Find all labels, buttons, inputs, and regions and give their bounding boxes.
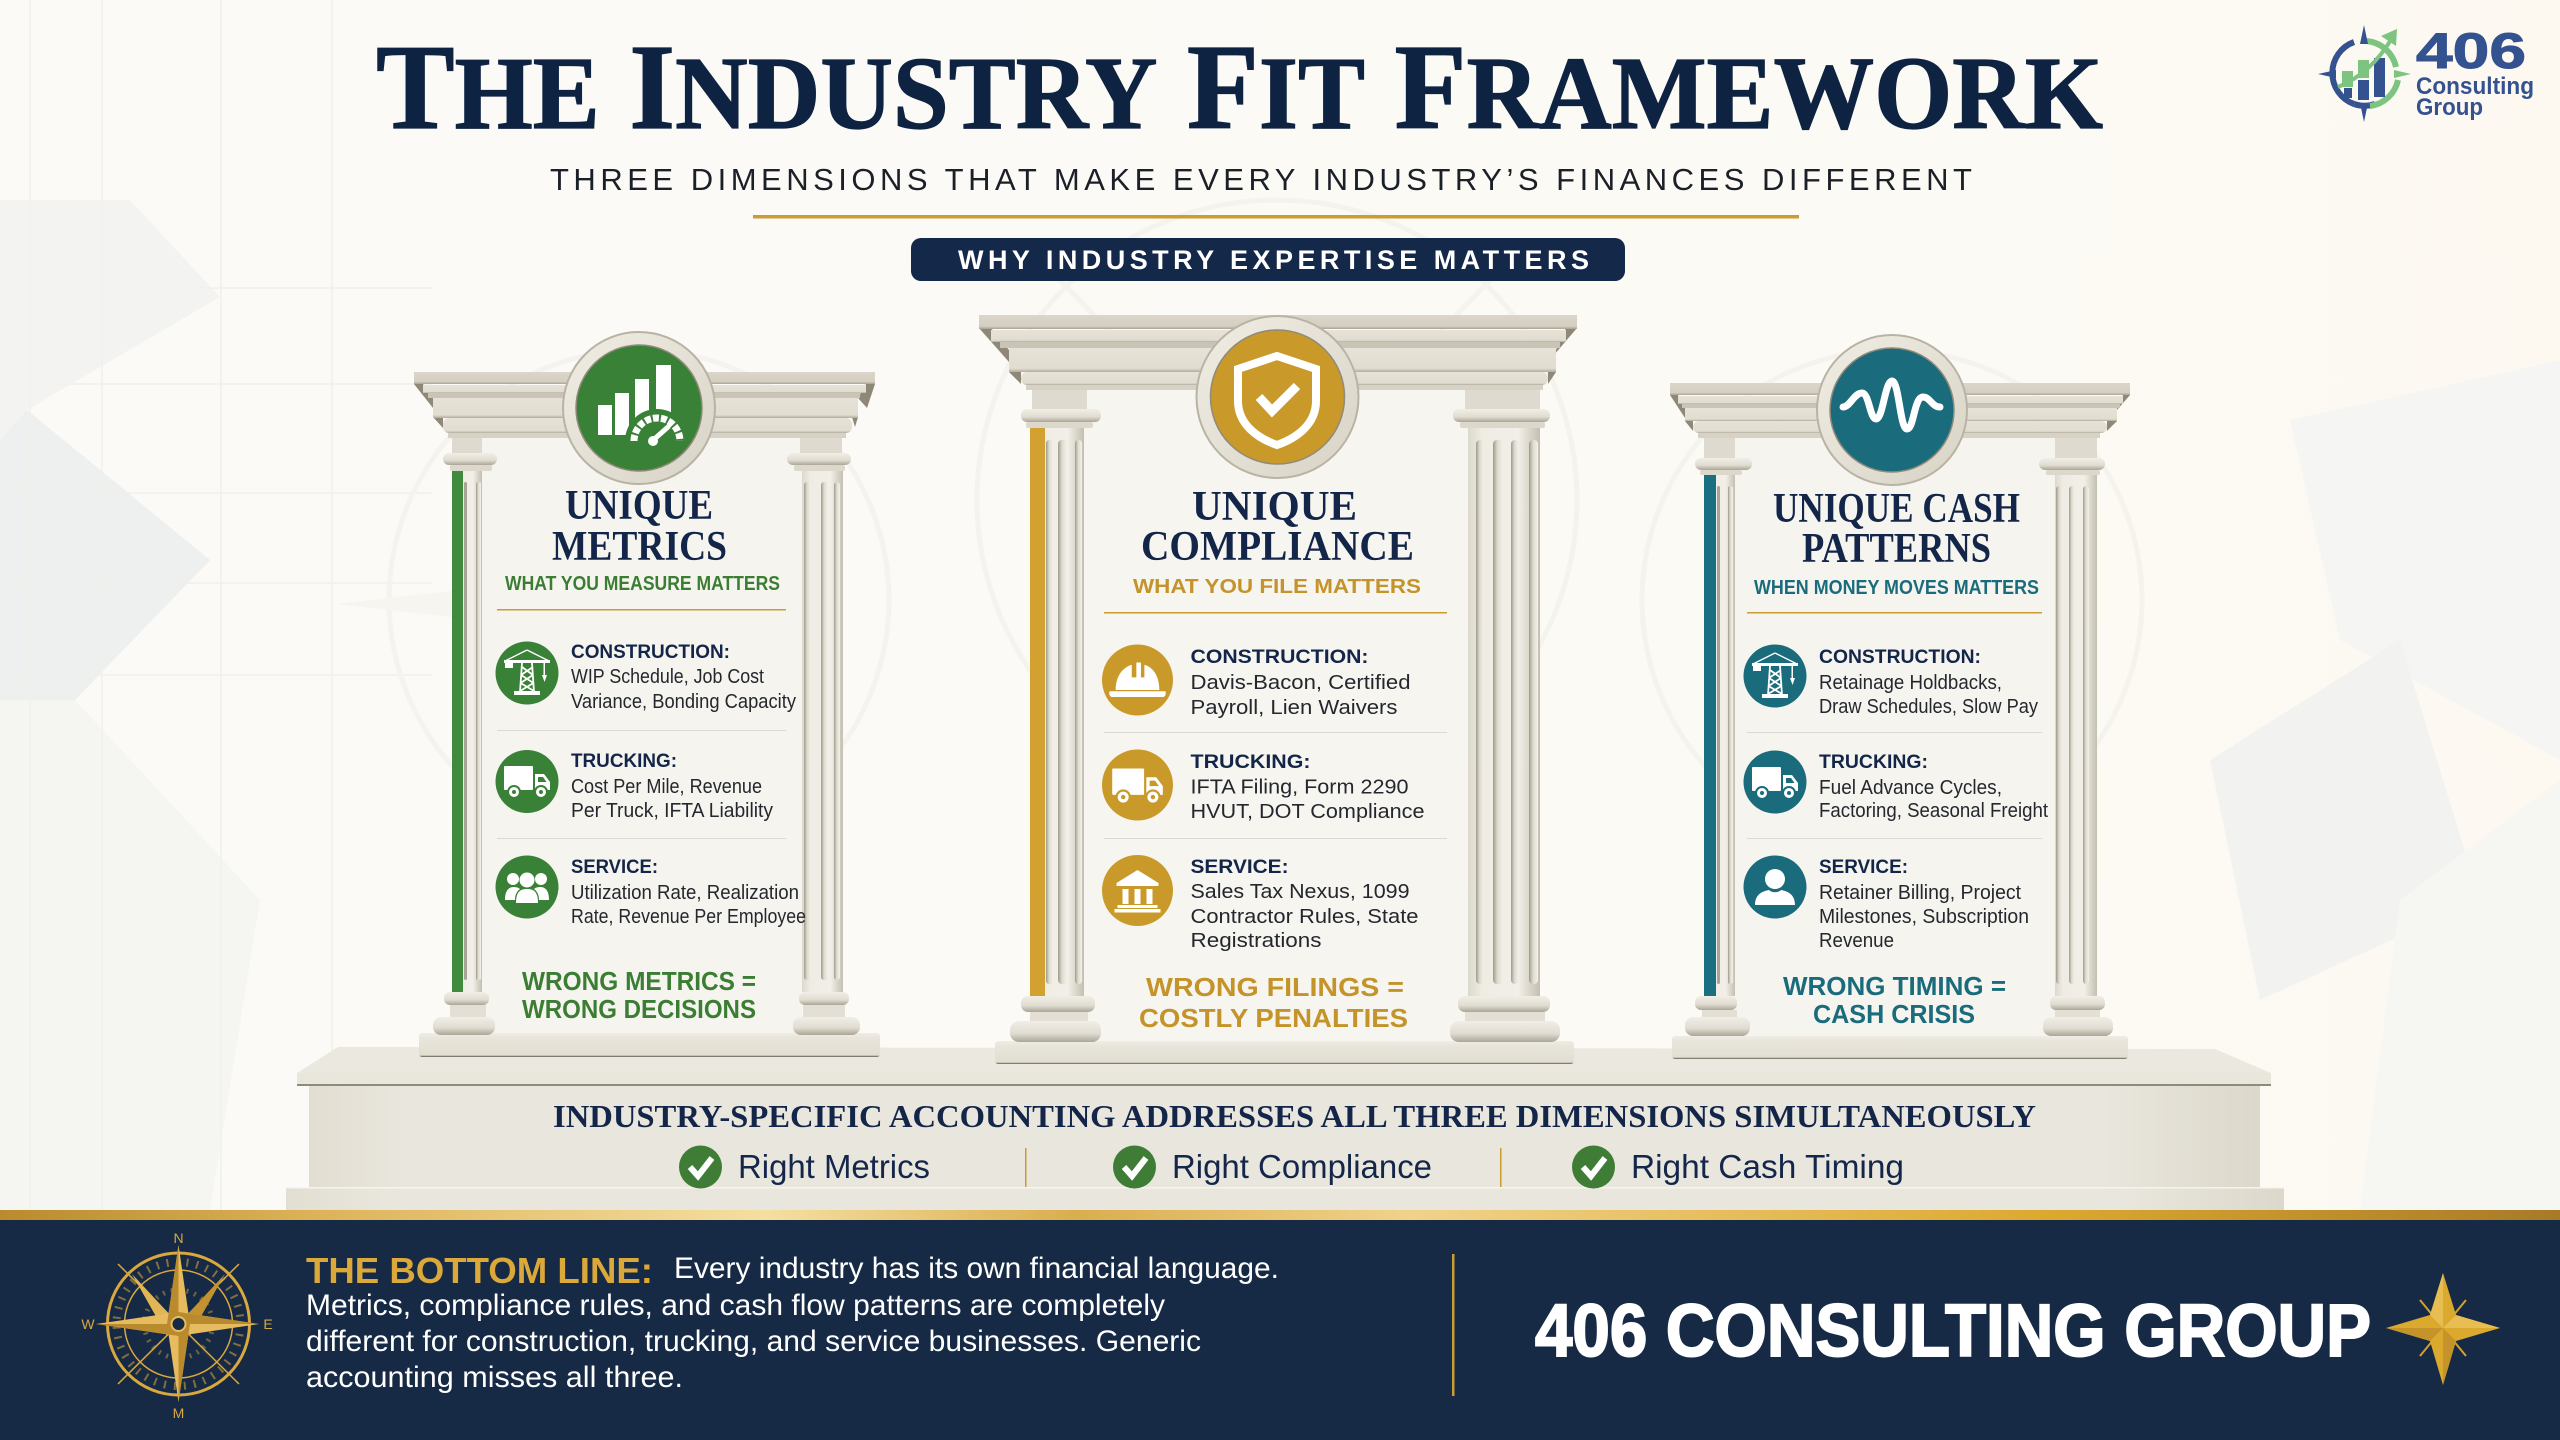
tagline: WHAT YOU MEASURE MATTERS bbox=[505, 573, 780, 595]
row: construction: Retainage Holdbacks, bbox=[1819, 672, 2002, 694]
panel: unique cash patterns bbox=[1670, 335, 2130, 1059]
pillar architecture bbox=[414, 372, 880, 1057]
row: service: Milestones, Subscription bbox=[1819, 906, 2029, 928]
pedestal bbox=[286, 1047, 2284, 1210]
checklist: right metrics: Right Metrics bbox=[738, 1148, 930, 1185]
row: service: SERVICE: bbox=[1190, 856, 1288, 878]
logo wordmark bbox=[2416, 23, 2534, 121]
row: construction bbox=[1744, 644, 2038, 718]
checklist: right metrics bbox=[679, 1146, 930, 1188]
bottom line text: THE BOTTOM LINE: bbox=[306, 1250, 653, 1291]
callout: WRONG TIMING = bbox=[1783, 973, 2006, 1001]
bottom line text: Metrics, compliance rules, and cash flow patterns are completely bbox=[306, 1289, 1165, 1322]
row: trucking: Cost Per Mile, Revenue bbox=[571, 776, 762, 798]
icon: compass rose: E bbox=[263, 1316, 273, 1332]
brand name: 406 CONSULTING GROUP bbox=[1535, 1289, 2371, 1372]
row: service: Revenue bbox=[1819, 930, 1894, 952]
row: construction: CONSTRUCTION: bbox=[1819, 646, 1981, 668]
icon: compass rose bbox=[81, 1230, 273, 1421]
row: service: SERVICE: bbox=[571, 856, 658, 878]
callout: CASH CRISIS bbox=[1813, 1001, 1975, 1029]
banner: why industry expertise matters: WHY INDUSTRY EXPERTISE MATTERS bbox=[958, 245, 1589, 275]
row: trucking: TRUCKING: bbox=[571, 750, 677, 772]
icon medallion: bars and gauge bbox=[563, 332, 715, 484]
icon: compass rose: N bbox=[173, 1230, 184, 1246]
heading: UNIQUE CASH bbox=[1773, 486, 2020, 532]
row: service bbox=[1102, 855, 1418, 952]
heading: COMPLIANCE bbox=[1141, 524, 1414, 570]
icon: compass growth mark bbox=[2318, 25, 2411, 122]
bottom line text: different for construction, trucking, and service businesses. Generic bbox=[306, 1325, 1201, 1358]
icon: gold star bbox=[2386, 1273, 2500, 1385]
checklist: right cash timing bbox=[1572, 1146, 1904, 1188]
checklist: right compliance: Right Compliance bbox=[1172, 1148, 1432, 1185]
pedestal headline: INDUSTRY-SPECIFIC ACCOUNTING ADDRESSES ALL THREE DIMENSIONS SIMULTANEOUSLY bbox=[553, 1098, 2036, 1134]
row: trucking bbox=[496, 750, 773, 822]
row: service: Retainer Billing, Project bbox=[1819, 882, 2021, 904]
icon medallion: cash wave bbox=[1817, 335, 1967, 485]
checklist: right cash timing: Right Cash Timing bbox=[1631, 1148, 1904, 1185]
heading: UNIQUE bbox=[565, 483, 713, 529]
footer band bbox=[0, 1210, 2560, 1440]
callout: WRONG FILINGS = bbox=[1146, 974, 1404, 1002]
tagline: WHEN MONEY MOVES MATTERS bbox=[1754, 577, 2039, 599]
callout: WRONG DECISIONS bbox=[522, 996, 756, 1024]
heading bbox=[1773, 486, 2020, 572]
pillar architecture bbox=[1670, 383, 2130, 1059]
pillar architecture bbox=[979, 315, 1577, 1064]
row: service: Contractor Rules, State bbox=[1190, 906, 1418, 928]
row: trucking: HVUT, DOT Compliance bbox=[1190, 801, 1424, 823]
callout: WRONG METRICS = bbox=[522, 968, 756, 996]
title: THE INDUSTRY FIT FRAMEWORK bbox=[376, 20, 2103, 155]
heading bbox=[552, 483, 727, 570]
heading: METRICS bbox=[552, 524, 727, 570]
icon medallion: shield bbox=[1196, 316, 1358, 478]
row: service bbox=[496, 856, 806, 928]
row: service: Utilization Rate, Realization bbox=[571, 882, 799, 904]
row: trucking: Fuel Advance Cycles, bbox=[1819, 777, 2002, 799]
row: trucking: TRUCKING: bbox=[1190, 751, 1310, 773]
icon: compass rose: W bbox=[81, 1316, 95, 1332]
row: construction: Draw Schedules, Slow Pay bbox=[1819, 696, 2038, 718]
row: trucking: IFTA Filing, Form 2290 bbox=[1190, 776, 1408, 798]
row: trucking bbox=[1744, 750, 2048, 822]
row: construction bbox=[496, 641, 796, 713]
row: service: Sales Tax Nexus, 1099 bbox=[1190, 881, 1410, 903]
subtitle: THREE DIMENSIONS THAT MAKE EVERY INDUSTRY’S FINANCES DIFFERENT bbox=[550, 162, 1972, 197]
row: service: SERVICE: bbox=[1819, 856, 1908, 878]
row: construction: Payroll, Lien Waivers bbox=[1190, 697, 1398, 719]
row: construction: Variance, Bonding Capacity bbox=[571, 691, 796, 713]
heading bbox=[1141, 484, 1414, 570]
heading: UNIQUE bbox=[1192, 484, 1357, 530]
row: trucking: Factoring, Seasonal Freight bbox=[1819, 800, 2048, 822]
row: construction: Davis-Bacon, Certified bbox=[1190, 672, 1410, 694]
callout bbox=[1139, 974, 1408, 1033]
row: construction bbox=[1102, 644, 1410, 719]
bottom line text: accounting misses all three. bbox=[306, 1361, 683, 1394]
bottom line text bbox=[306, 1250, 1279, 1394]
row: trucking: TRUCKING: bbox=[1819, 751, 1928, 773]
row: trucking bbox=[1102, 750, 1424, 823]
banner: why industry expertise matters bbox=[911, 238, 1625, 281]
logo: 406 Consulting Group bbox=[2318, 23, 2534, 122]
callout: COSTLY PENALTIES bbox=[1139, 1005, 1408, 1033]
row: construction: CONSTRUCTION: bbox=[1190, 646, 1368, 668]
row: service: Rate, Revenue Per Employee bbox=[571, 906, 806, 928]
row: trucking: Per Truck, IFTA Liability bbox=[571, 800, 773, 822]
bottom line text: Every industry has its own financial language. bbox=[674, 1252, 1279, 1285]
logo wordmark: 406 bbox=[2416, 23, 2526, 79]
panel: unique compliance bbox=[979, 315, 1577, 1064]
tagline: WHAT YOU FILE MATTERS bbox=[1133, 576, 1421, 598]
row: service: Registrations bbox=[1190, 930, 1322, 952]
row: construction: CONSTRUCTION: bbox=[571, 641, 730, 663]
callout bbox=[522, 968, 756, 1024]
logo wordmark: Group bbox=[2416, 94, 2483, 121]
row: service bbox=[1744, 856, 2029, 952]
logo wordmark: Consulting bbox=[2416, 73, 2534, 100]
panel: unique metrics bbox=[414, 332, 880, 1057]
icon: compass rose: M bbox=[173, 1405, 184, 1421]
row: construction: WIP Schedule, Job Cost bbox=[571, 666, 764, 688]
callout bbox=[1783, 973, 2006, 1029]
heading: PATTERNS bbox=[1802, 526, 1991, 572]
